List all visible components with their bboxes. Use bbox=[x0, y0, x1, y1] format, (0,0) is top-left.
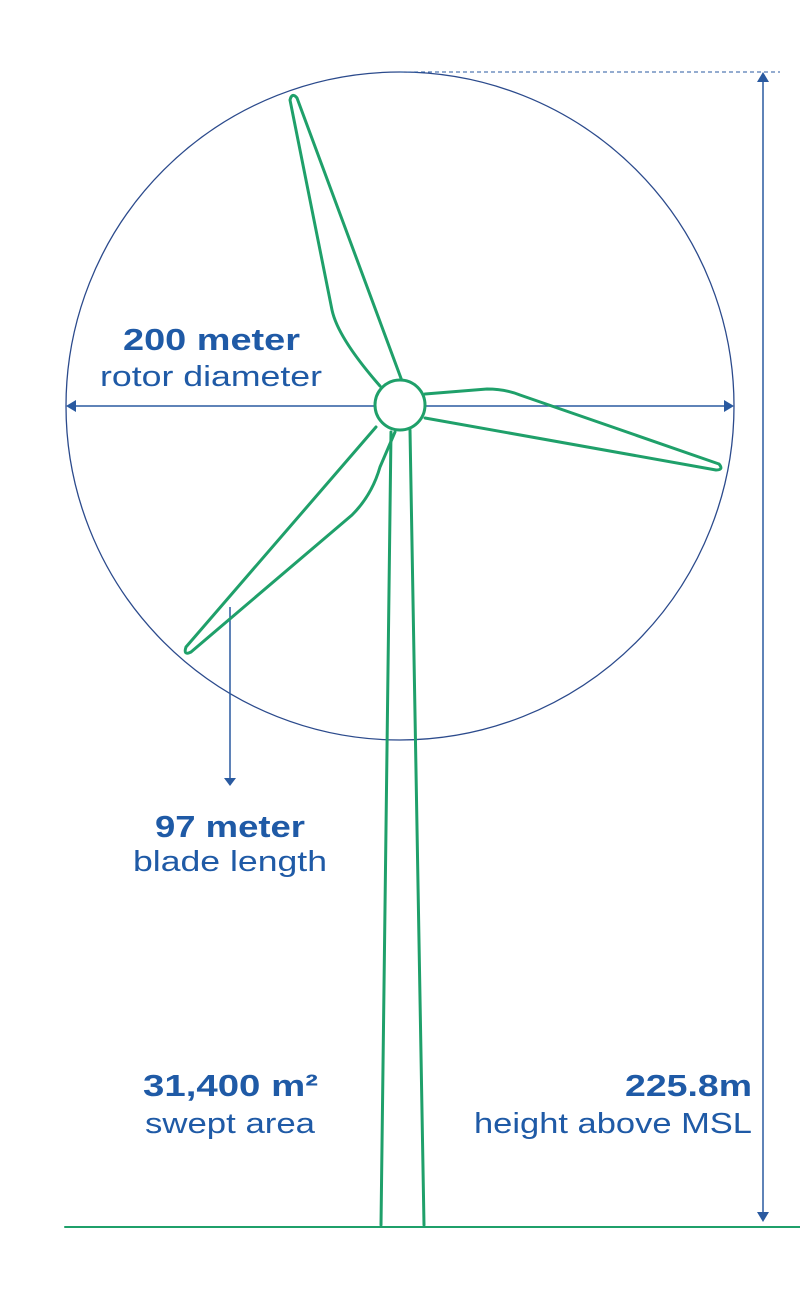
label: swept area: 31,400 m² bbox=[143, 1068, 318, 1103]
label: rotor diameter bbox=[100, 322, 322, 393]
label: swept area: swept area bbox=[145, 1108, 316, 1140]
label: blade length: blade length bbox=[133, 846, 327, 878]
label: height: height above MSL bbox=[474, 1108, 752, 1140]
label: blade length bbox=[133, 809, 327, 878]
label: rotor diameter: 200 meter bbox=[123, 322, 300, 357]
label: height: 225.8m bbox=[625, 1068, 752, 1103]
ground bbox=[65, 1226, 800, 1228]
blade: right bbox=[425, 389, 721, 470]
label: height bbox=[474, 1068, 752, 1140]
blade length arrow bbox=[224, 607, 236, 786]
blade: top bbox=[290, 95, 402, 386]
label: rotor diameter: rotor diameter bbox=[100, 361, 322, 393]
hub bbox=[375, 380, 425, 430]
tower bbox=[381, 430, 424, 1225]
rotor diameter arrow bbox=[66, 400, 734, 412]
height arrow bbox=[400, 72, 780, 1222]
label: swept area bbox=[143, 1068, 318, 1140]
wind turbine bbox=[65, 95, 800, 1227]
swept area circle bbox=[66, 72, 734, 740]
blade: lower bbox=[185, 427, 395, 653]
label: blade length: 97 meter bbox=[155, 809, 305, 844]
